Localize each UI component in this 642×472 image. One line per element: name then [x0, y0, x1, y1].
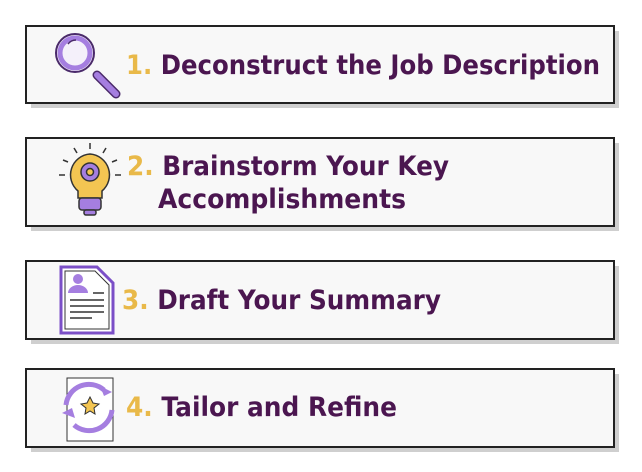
- panel: step 2: Accomplishments: [158, 184, 406, 215]
- icon: magnifying glass: [56, 34, 116, 94]
- heading: step 4: 4. Tailor and Refine: [126, 392, 397, 423]
- heading: step 1: 1. Deconstruct the Job Description: [126, 50, 600, 81]
- icon: refresh star: [62, 378, 113, 441]
- panel: step 4: [26, 369, 619, 452]
- panel: step 2: [26, 138, 619, 231]
- heading: step 2: 2. Brainstorm Your Key: [127, 151, 449, 182]
- icon: document: [61, 267, 113, 333]
- panel: step 3: [26, 261, 619, 344]
- heading: step 3: 3. Draft Your Summary: [122, 285, 441, 316]
- icon: light bulb: [59, 143, 121, 215]
- panel: step 1: [26, 26, 619, 108]
